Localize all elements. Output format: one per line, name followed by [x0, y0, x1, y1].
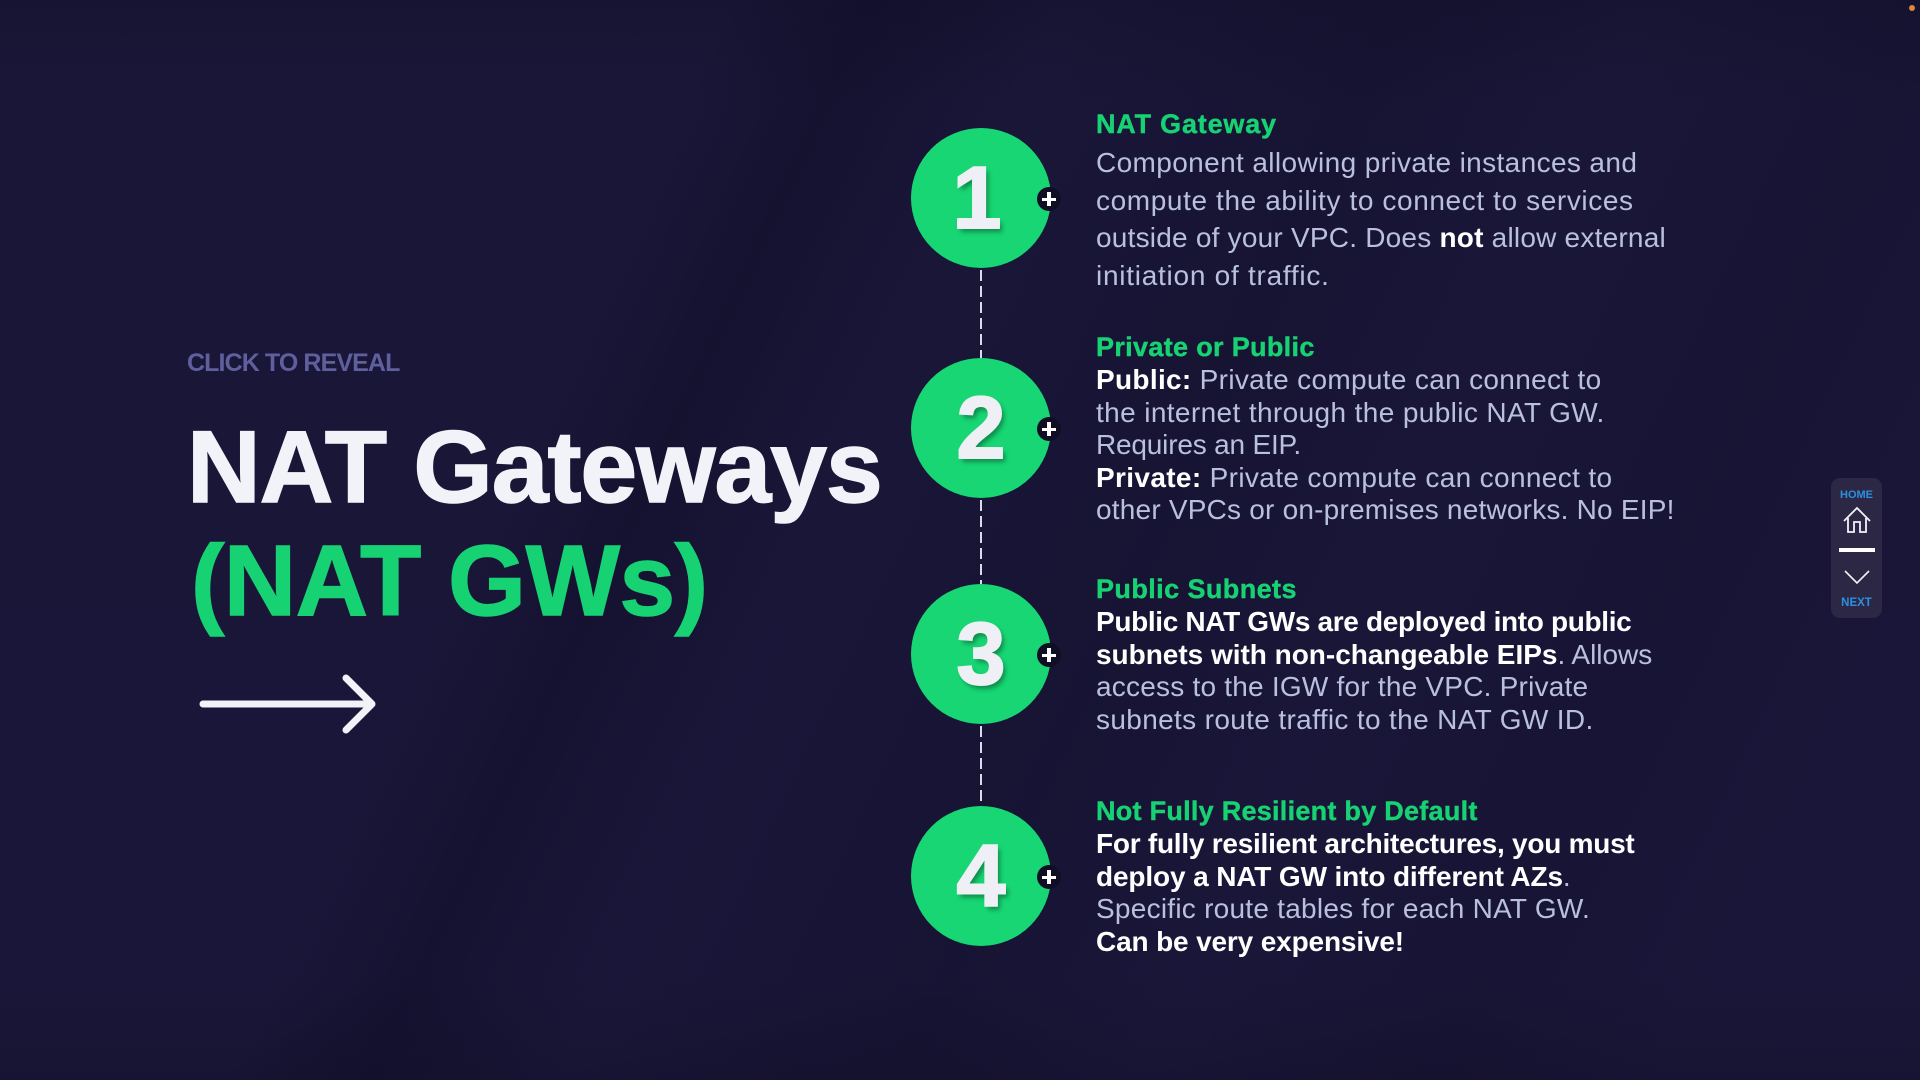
navigation panel	[1831, 478, 1882, 618]
text block: step 3 body	[1096, 606, 1652, 735]
panel: step 4 text	[1096, 796, 1635, 957]
text: Private: Private compute can connect to	[1096, 462, 1612, 493]
text: other VPCs or on-premises networks. No EIP!	[1096, 494, 1675, 525]
text block: step 4 body	[1096, 828, 1635, 957]
text block: step 2 body	[1096, 364, 1675, 525]
heading: Not Fully Resilient by Default: Not Fully Resilient by Default	[1096, 796, 1478, 826]
panel: step 3 text	[1096, 574, 1652, 735]
status dot	[1909, 5, 1915, 11]
text: Can be very expensive!	[1096, 926, 1404, 957]
connector: 2 to 3	[980, 500, 982, 584]
step circle 1: 1	[953, 148, 1001, 247]
nav label: next: NEXT	[1841, 597, 1872, 609]
text: the internet through the public NAT GW.	[1096, 397, 1605, 428]
step circle 4: 4	[957, 826, 1005, 925]
text: subnets route traffic to the NAT GW ID.	[1096, 704, 1594, 735]
subtitle: NAT GWs: (NAT GWs)	[191, 525, 708, 637]
title: NAT Gateways: NAT Gateways	[187, 410, 882, 524]
step circle 2: 2	[957, 378, 1005, 477]
text: outside of your VPC. Does not allow external	[1096, 222, 1666, 253]
divider bar	[1839, 548, 1875, 552]
icon: house	[1843, 506, 1871, 533]
nav label: home: HOME	[1840, 489, 1873, 501]
connector: 1 to 2	[980, 270, 982, 358]
step circle 4	[911, 806, 1051, 946]
text: Specific route tables for each NAT GW.	[1096, 893, 1590, 924]
text: For fully resilient architectures, you must	[1096, 828, 1635, 859]
text: Component allowing private instances and	[1096, 147, 1637, 178]
connector: 3 to 4	[980, 726, 982, 806]
text block: step 1 body	[1096, 147, 1666, 291]
panel: step 1 text	[1096, 109, 1666, 291]
arrow: pointing right	[200, 674, 376, 734]
step circle 3	[911, 584, 1051, 724]
heading: Private or Public: Private or Public	[1096, 332, 1315, 362]
text: deploy a NAT GW into different AZs.	[1096, 861, 1571, 892]
text: Public NAT GWs are deployed into public	[1096, 606, 1631, 637]
text: initiation of traffic.	[1096, 260, 1330, 291]
panel: step 2 text	[1096, 332, 1675, 525]
step circle 3: 3	[957, 604, 1005, 703]
icon: chevron down	[1844, 570, 1870, 584]
text: access to the IGW for the VPC. Private	[1096, 671, 1588, 702]
heading: NAT Gateway: NAT Gateway	[1096, 109, 1277, 139]
text: Public: Private compute can connect to	[1096, 364, 1602, 395]
text: compute the ability to connect to services	[1096, 185, 1634, 216]
heading: Public Subnets: Public Subnets	[1096, 574, 1297, 604]
step circle 1	[911, 128, 1051, 268]
label: click to reveal: CLICK TO REVEAL	[187, 349, 399, 377]
step circle 2	[911, 358, 1051, 498]
text: Requires an EIP.	[1096, 429, 1301, 460]
text: subnets with non-changeable EIPs. Allows	[1096, 639, 1652, 670]
